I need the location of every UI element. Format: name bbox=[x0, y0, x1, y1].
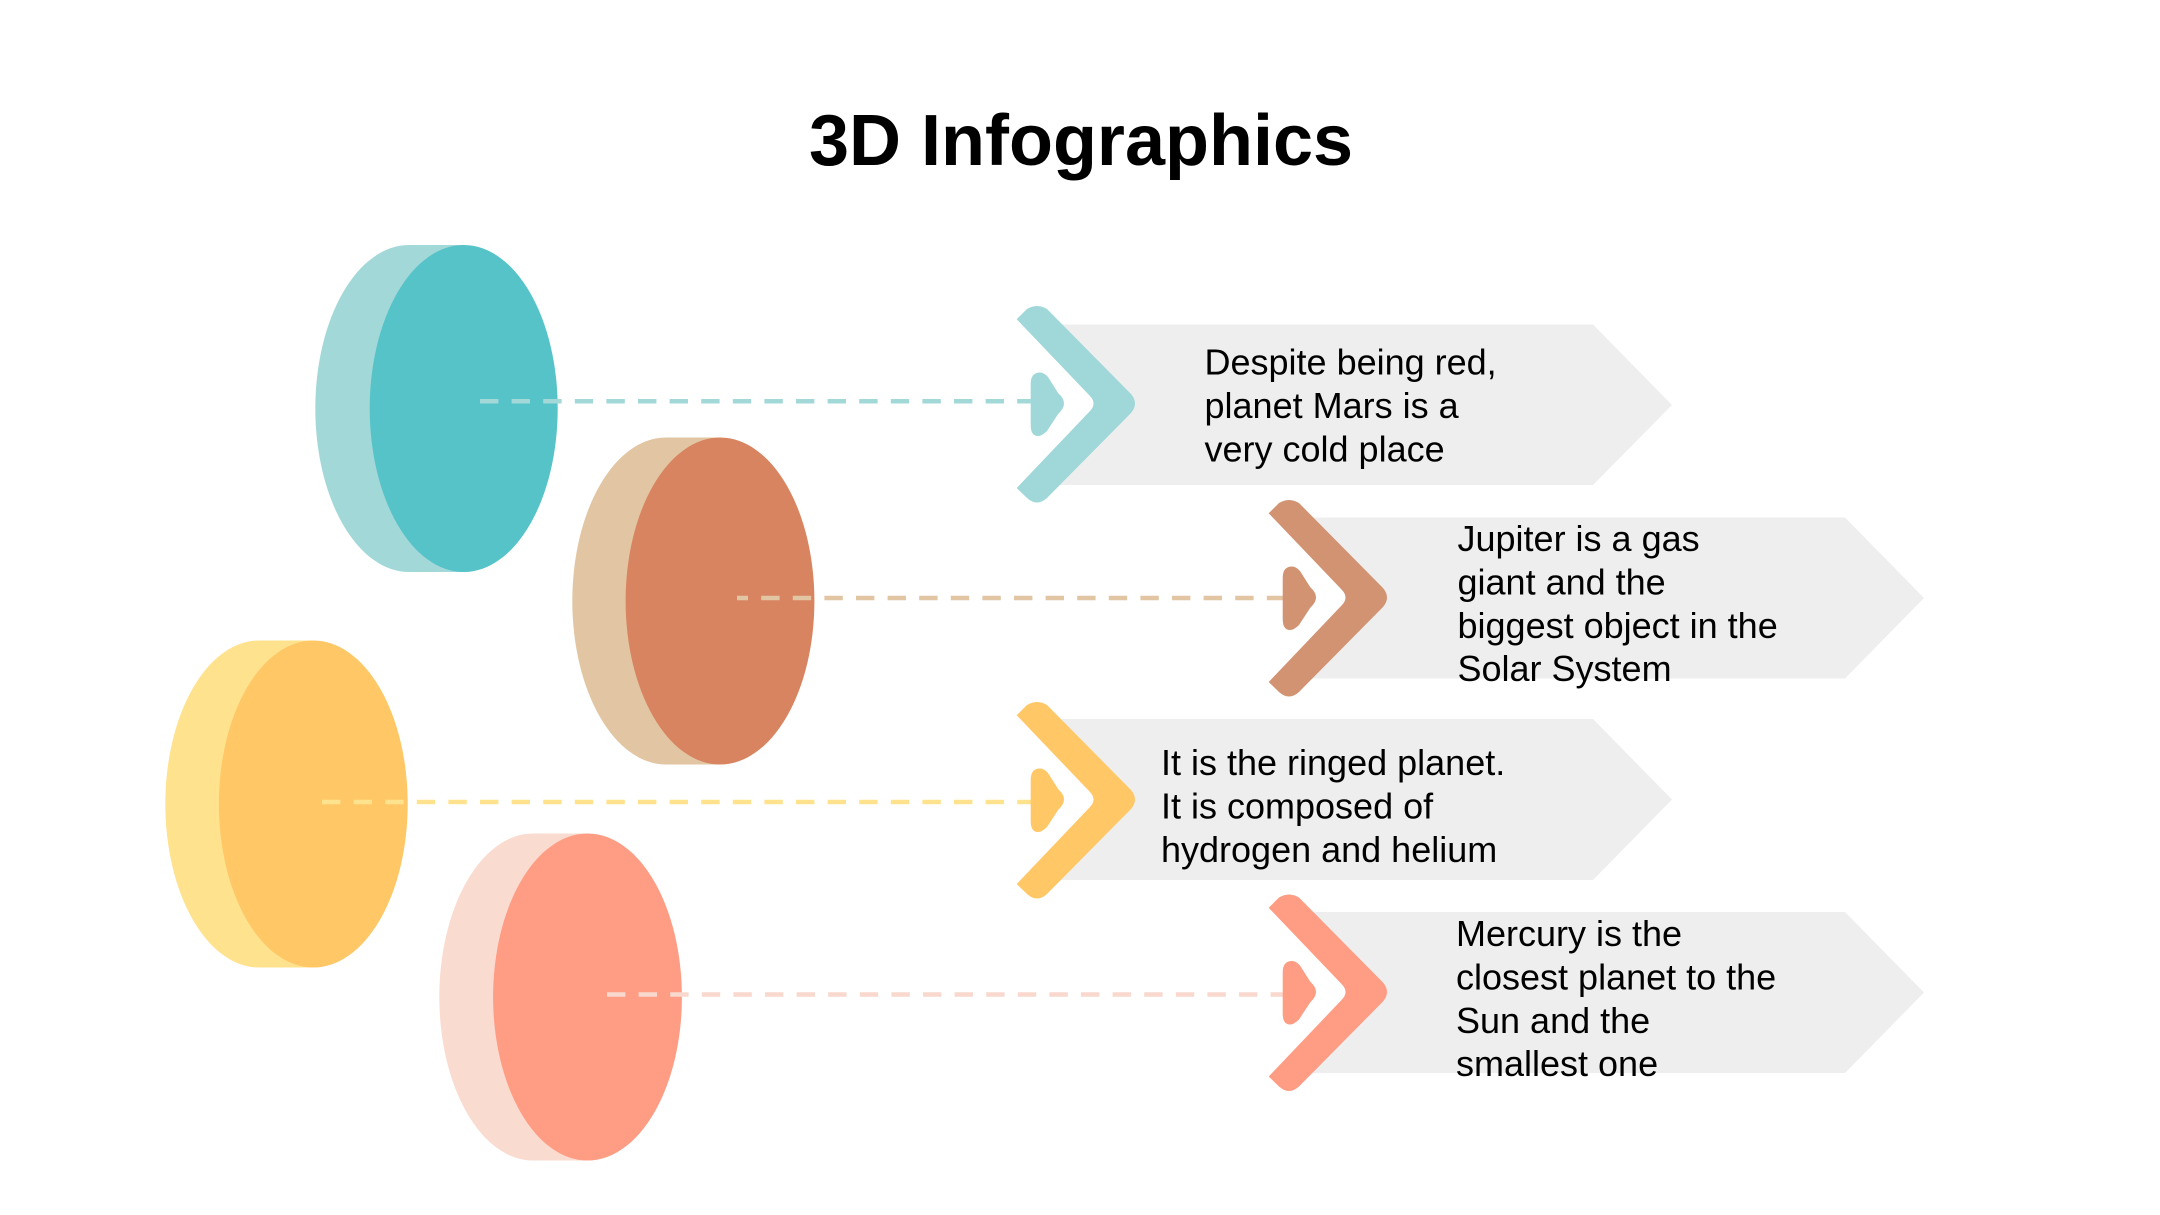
text: Mars: Despite being red, bbox=[1204, 342, 1497, 382]
text: Jupiter: Solar System bbox=[1458, 648, 1672, 689]
arrow: coral bbox=[1269, 894, 1387, 1091]
dashed connector: terracotta bbox=[737, 596, 1286, 600]
dashed connector: yellow bbox=[322, 800, 1034, 804]
text: Mercury: Mercury is the bbox=[1456, 913, 1682, 954]
text: Jupiter: Jupiter is a gas bbox=[1458, 518, 1700, 559]
arrow: terracotta bbox=[1269, 500, 1387, 696]
disc: terracotta bbox=[572, 438, 814, 764]
banner: Mars bbox=[1045, 324, 1672, 485]
text: Mars: planet Mars is a bbox=[1204, 385, 1460, 426]
text: Mercury: closest planet to the bbox=[1456, 956, 1776, 997]
banner: Mercury bbox=[1297, 912, 1924, 1084]
text: Saturn: It is the ringed planet. bbox=[1161, 742, 1505, 783]
arrow: teal bbox=[1017, 306, 1135, 502]
text: Jupiter: giant and the bbox=[1458, 561, 1666, 602]
text: Mercury: Sun and the bbox=[1456, 1000, 1650, 1041]
dashed connector: coral bbox=[607, 992, 1286, 997]
title: 3D Infographics bbox=[809, 101, 1353, 181]
dashed connector: teal bbox=[480, 399, 1034, 404]
text: Mercury: smallest one bbox=[1456, 1043, 1658, 1084]
text: Jupiter: biggest object in the bbox=[1458, 605, 1778, 646]
text: Mars: very cold place bbox=[1204, 428, 1445, 469]
disc: yellow bbox=[165, 640, 408, 968]
banner: Saturn bbox=[1045, 719, 1672, 880]
banner: Jupiter bbox=[1297, 518, 1924, 689]
text: Saturn: hydrogen and helium bbox=[1161, 829, 1497, 870]
arrow: yellow bbox=[1017, 702, 1135, 898]
disc: teal bbox=[315, 245, 558, 572]
disc: coral bbox=[439, 834, 682, 1160]
text: Saturn: It is composed of bbox=[1161, 785, 1434, 826]
